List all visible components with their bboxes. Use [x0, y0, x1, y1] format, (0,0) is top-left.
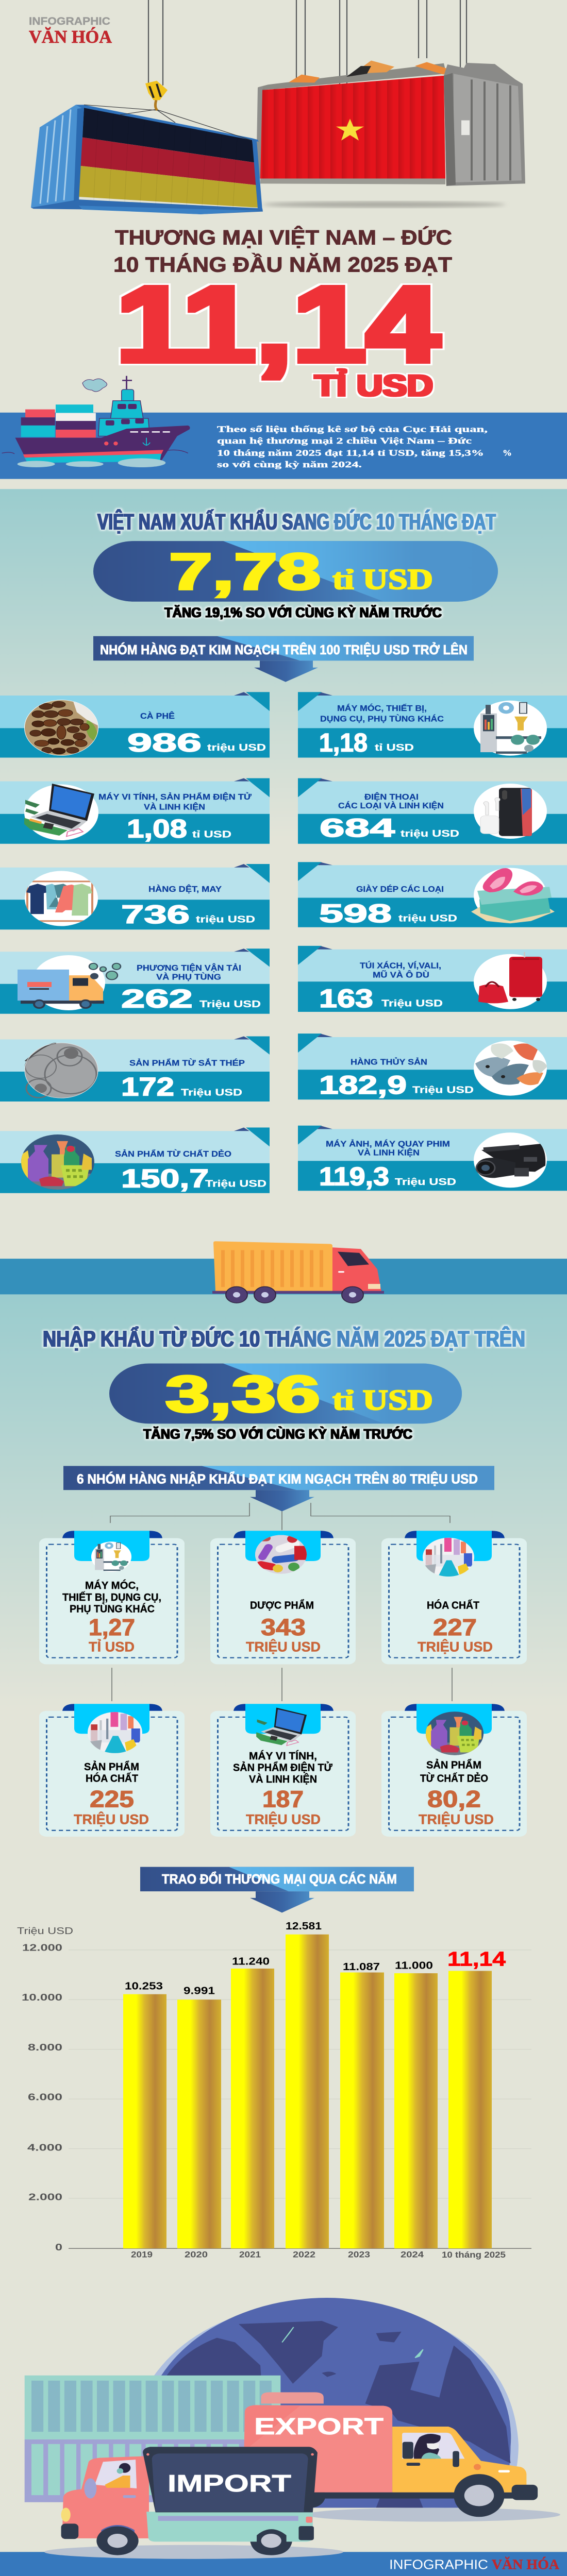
- import card: san pham tu chat deo: TRIỆU USD: [419, 1811, 494, 1827]
- card: tui xach: 163: [319, 985, 373, 1013]
- import card: may vi tinh: 187: [262, 1787, 304, 1812]
- illustration: import truck: [61, 2447, 318, 2555]
- card: hang det may: 736: [121, 901, 190, 929]
- bar chart: trade by year: Triệu USD: [17, 1925, 73, 1936]
- card: hang det may: HÀNG DỆT, MAY: [148, 885, 222, 894]
- illustration: germany container: [31, 81, 263, 214]
- blue intro band: [0, 413, 567, 479]
- import card: hoa chat: 227: [433, 1615, 477, 1640]
- card: hang det may: triệu USD: [196, 914, 255, 925]
- logo: infographic van hoa: VĂN HÓA: [29, 27, 112, 47]
- card: dien thoai: triệu USD: [401, 828, 459, 839]
- card: tui xach: Triệu USD: [381, 998, 443, 1009]
- import truck shadow: [44, 2545, 343, 2559]
- card: may vi tinh: VÀ LINH KIỆN: [144, 802, 205, 811]
- export truck shadow: [306, 2507, 560, 2522]
- card: may anh: Triệu USD: [395, 1177, 456, 1187]
- card: ca phe: triệu USD: [207, 742, 266, 753]
- card: hang thuy san: [298, 1033, 567, 1099]
- footer band: [0, 2552, 567, 2576]
- card: phuong tien van tai: [0, 948, 270, 1014]
- card: san pham tu chat deo: Triệu USD: [205, 1179, 266, 1189]
- import card: san pham tu chat deo: 80,2: [427, 1787, 481, 1812]
- import card: san pham tu chat deo: [381, 1704, 527, 1837]
- bar chart: trade by year: 2023: [348, 2250, 370, 2260]
- import card: san pham hoa chat: SẢN PHẨM: [84, 1760, 139, 1773]
- import card: may moc: THIẾT BỊ, DỤNG CỤ,: [62, 1591, 161, 1603]
- import card: san pham hoa chat: TRIỆU USD: [74, 1811, 149, 1827]
- card: hang thuy san: 182,9: [319, 1071, 407, 1099]
- bar chart: trade by year: 4.000: [27, 2142, 62, 2153]
- connector lines: [110, 1503, 452, 1701]
- illustration: export truck: [244, 2392, 538, 2517]
- logo: infographic van hoa: INFOGRAPHIC: [29, 15, 110, 27]
- bar chart: trade by year: 2.000: [28, 2192, 62, 2202]
- illustration: cargo ship: [2, 376, 190, 467]
- illustration: shipping containers: [25, 2376, 280, 2502]
- card: san pham tu chat deo: SẢN PHẨM TỪ CHẤT DẺO: [115, 1149, 231, 1158]
- import section background: [0, 1294, 567, 1708]
- card: may moc thiet bi: MÁY MÓC, THIẾT BỊ,: [337, 704, 427, 713]
- footer logo: INFOGRAPHIC: [389, 2557, 488, 2572]
- import card: duoc pham: 343: [261, 1615, 306, 1640]
- card: tui xach: MŨ VÀ Ô DÙ: [373, 970, 429, 979]
- import card: hoa chat: TRIỆU USD: [418, 1639, 493, 1654]
- card: phuong tien van tai: PHƯƠNG TIỆN VẬN TẢI: [137, 963, 241, 973]
- title: [113, 226, 452, 277]
- card: may vi tinh: [0, 778, 270, 844]
- bar chart: trade by year: 2021: [239, 2250, 261, 2260]
- logo: infographic van hoa: [29, 15, 112, 47]
- card: may vi tinh: 1,08: [127, 815, 187, 843]
- import card: may vi tinh: [210, 1704, 356, 1837]
- import card: may moc: [39, 1531, 185, 1664]
- export growth note: TĂNG 19,1% SO VỚI CÙNG KỲ NĂM TRƯỚC: [164, 604, 442, 620]
- export label: EXPORT: [254, 2414, 383, 2439]
- bar chart: trade by year: 9.991: [184, 1985, 215, 1997]
- card: may vi tinh: tỉ USD: [192, 829, 231, 840]
- bar chart: trade by year: 12.000: [22, 1942, 62, 1953]
- illustration: delivery truck: [212, 1241, 384, 1303]
- bar chart: trade by year: 11.240: [232, 1956, 270, 1968]
- card: ca phe: CÀ PHÊ: [140, 711, 175, 721]
- headline unit: TỈ USD: [314, 368, 433, 402]
- bar chart: trade by year: 11.087: [343, 1961, 380, 1973]
- illustration: vietnam container: [256, 61, 525, 186]
- import card: may vi tinh: VÀ LINH KIỆN: [249, 1773, 317, 1785]
- card: giay dep: 598: [319, 900, 392, 928]
- bar chart: trade by year: 2019: [131, 2250, 153, 2260]
- card: tui xach: [298, 946, 567, 1013]
- import total pill: tỉ USD: [332, 1385, 433, 1416]
- card: phuong tien van tai: 262: [121, 985, 193, 1013]
- import card: may vi tinh: SẢN PHẨM ĐIỆN TỬ: [233, 1761, 332, 1774]
- card: tui xach: TÚI XÁCH, VÍ,VALI,: [360, 961, 441, 970]
- export section background: [0, 489, 567, 838]
- import card: may moc: PHỤ TÙNG KHÁC: [70, 1603, 155, 1615]
- card: may moc thiet bi: 1,18: [319, 728, 368, 757]
- card: dien thoai: ĐIỆN THOẠI: [364, 792, 419, 801]
- card: san pham tu sat thep: SẢN PHẨM TỪ SẮT THÉP: [129, 1058, 245, 1067]
- card: san pham tu sat thep: [0, 1036, 270, 1101]
- trade history banner: [140, 1867, 414, 1913]
- intro paragraph: quan hệ thương mại 2 chiều Việt Nam – Đức: [217, 436, 472, 446]
- export total pill: [93, 541, 498, 602]
- import label: IMPORT: [168, 2469, 291, 2497]
- icon: yellow star: [336, 119, 364, 141]
- card: may vi tinh: MÁY VI TÍNH, SẢN PHẨM ĐIỆN TỬ: [98, 792, 252, 801]
- card: san pham tu chat deo: [0, 1127, 270, 1193]
- import card: san pham hoa chat: 225: [90, 1787, 134, 1812]
- bar chart: trade by year: 6.000: [28, 2091, 62, 2103]
- trade history banner: TRAO ĐỔI THƯƠNG MẠI QUA CÁC NĂM: [162, 1872, 397, 1887]
- import card: duoc pham: DƯỢC PHẨM: [250, 1599, 314, 1612]
- intro paragraph: Theo số liệu thống kê sơ bộ của Cục Hải quan,: [217, 425, 488, 434]
- import total pill: 3,36: [165, 1365, 320, 1422]
- card: san pham tu sat thep: Triệu USD: [181, 1088, 242, 1098]
- card: may anh: MÁY ẢNH, MÁY QUAY PHIM: [326, 1139, 450, 1148]
- import card: may vi tinh: MÁY VI TÍNH,: [249, 1750, 317, 1762]
- card: hang det may: [0, 864, 270, 929]
- card: giay dep: triệu USD: [398, 913, 457, 924]
- title: 10 THÁNG ĐẦU NĂM 2025 ĐẠT: [113, 253, 452, 277]
- bar chart: trade by year: 2024: [401, 2250, 424, 2260]
- bar chart: trade by year: 10.000: [22, 1992, 62, 2003]
- import card: duoc pham: TRIỆU USD: [246, 1639, 321, 1654]
- import card: san pham hoa chat: [39, 1704, 185, 1837]
- footer logo: [389, 2557, 559, 2572]
- bar chart: trade by year: 0: [55, 2242, 62, 2252]
- bar chart: trade by year: 10.253: [125, 1980, 163, 1992]
- illustration: globe: [154, 2298, 519, 2507]
- import growth note: TĂNG 7,5% SO VỚI CÙNG KỲ NĂM TRƯỚC: [143, 1426, 412, 1442]
- import card: san pham tu chat deo: TỪ CHẤT DẺO: [420, 1772, 488, 1785]
- crane cables: [148, 0, 466, 86]
- card: may anh: [298, 1126, 567, 1191]
- card: hang thuy san: Triệu USD: [412, 1084, 474, 1095]
- export total pill: 7,78: [169, 543, 321, 600]
- import card: san pham hoa chat: HÓA CHẤT: [86, 1772, 138, 1785]
- bar chart: trade by year: 12.581: [286, 1920, 322, 1932]
- import card: san pham tu chat deo: SẢN PHẨM: [426, 1758, 481, 1771]
- card: dien thoai: 684: [320, 814, 395, 842]
- bar chart: trade by year: 8.000: [28, 2042, 62, 2053]
- export total pill: tỉ USD: [332, 564, 433, 596]
- import card: may moc: 1,27: [89, 1615, 135, 1640]
- headline number 11,14: 11,14: [116, 264, 440, 385]
- card: giay dep: GIÀY DÉP CÁC LOẠI: [356, 885, 444, 894]
- intro paragraph: 10 tháng năm 2025 đạt 11,14 tỉ USD, tăng 15,3%: [217, 448, 484, 458]
- card: phuong tien van tai: VÀ PHỤ TÙNG: [156, 972, 221, 981]
- floor shadow: [263, 201, 505, 208]
- import card: hoa chat: [381, 1531, 527, 1664]
- card: san pham tu sat thep: 172: [121, 1073, 174, 1101]
- card: may moc thiet bi: DỤNG CỤ, PHỤ TÙNG KHÁC: [320, 714, 444, 723]
- import group banner: [63, 1466, 494, 1512]
- title: THƯƠNG MẠI VIỆT NAM – ĐỨC: [115, 226, 452, 249]
- card: may anh: VÀ LINH KIỆN: [358, 1148, 420, 1157]
- intro paragraph: [217, 425, 512, 469]
- bar chart: trade by year: [17, 1920, 531, 2260]
- import card: hoa chat: HÓA CHẤT: [427, 1599, 479, 1612]
- bar chart: trade by year: 10 tháng 2025: [442, 2250, 506, 2260]
- hoisting ropes and hook: [84, 81, 251, 140]
- card: dien thoai: CÁC LOẠI VÀ LINH KIỆN: [338, 801, 444, 810]
- card: ca phe: [0, 692, 270, 758]
- card: phuong tien van tai: Triệu USD: [199, 999, 261, 1009]
- bar chart: trade by year: 11.000: [395, 1960, 433, 1972]
- import total pill: [109, 1364, 462, 1423]
- intro paragraph: %: [503, 448, 512, 458]
- intro paragraph: so với cùng kỳ năm 2024.: [217, 460, 362, 469]
- card: giay dep: [298, 862, 567, 928]
- card: san pham tu chat deo: 150,7: [121, 1164, 209, 1193]
- card: may anh: 119,3: [319, 1162, 389, 1191]
- bar chart: trade by year: 2020: [185, 2250, 208, 2260]
- card: dien thoai: [298, 778, 567, 844]
- import card: may vi tinh: TRIỆU USD: [246, 1811, 321, 1827]
- road band: [0, 1259, 567, 1294]
- card: may moc thiet bi: tỉ USD: [375, 742, 414, 753]
- import card: may moc: MÁY MÓC,: [85, 1580, 139, 1591]
- card: may moc thiet bi: [298, 692, 567, 758]
- card: ca phe: 986: [127, 728, 202, 757]
- bar chart: trade by year: 11,14: [447, 1947, 506, 1970]
- import card: may moc: TỈ USD: [89, 1639, 135, 1654]
- import card: duoc pham: [210, 1531, 356, 1664]
- card: hang thuy san: HÀNG THỦY SẢN: [351, 1057, 427, 1066]
- export group banner: [93, 636, 474, 682]
- bar chart: trade by year: 2022: [293, 2250, 315, 2260]
